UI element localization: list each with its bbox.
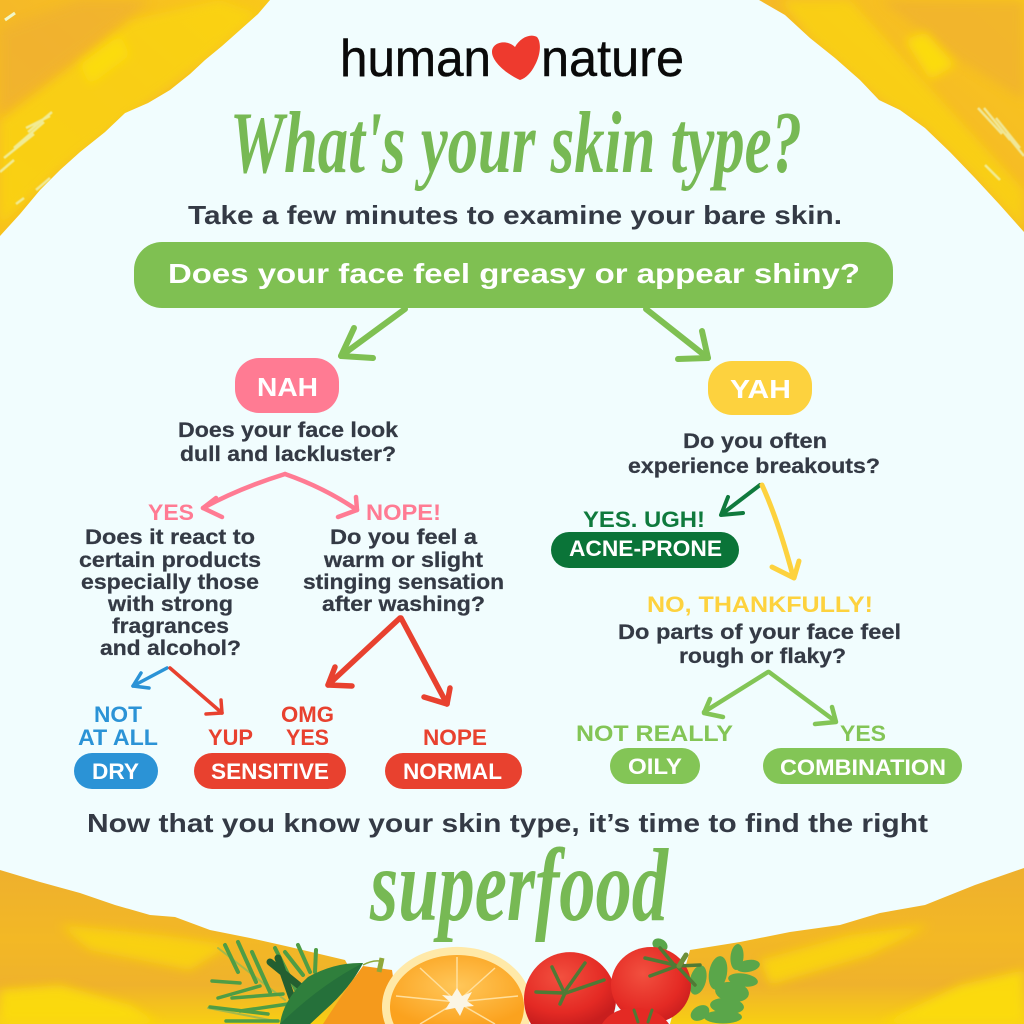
question: react: Does it react to xyxy=(85,526,255,549)
label: not really: NOT REALLY xyxy=(576,721,733,746)
YAH pill xyxy=(708,361,812,415)
logo: human xyxy=(340,30,491,88)
COMBINATION pill xyxy=(763,748,962,784)
question: rough xyxy=(618,621,901,668)
illustration: orange slice xyxy=(382,947,532,1024)
SENSITIVE pill: SENSITIVE xyxy=(211,759,329,784)
illustration: whole orange xyxy=(323,958,400,1024)
question: stinging: stinging sensation xyxy=(303,571,504,594)
arrows: light green xyxy=(704,672,836,724)
question: react: fragrances xyxy=(112,615,229,638)
arrow: to NAH xyxy=(341,309,405,358)
question: dull xyxy=(178,419,398,466)
illustration: herb sprig xyxy=(208,942,316,1021)
OILY pill xyxy=(610,748,700,784)
label: omg yes: YES xyxy=(286,725,329,750)
arrows: thick red xyxy=(328,618,450,704)
label: nope: NOPE xyxy=(423,725,487,750)
OILY pill: OILY xyxy=(628,754,682,779)
question: stinging: warm or slight xyxy=(323,549,483,572)
DRY pill xyxy=(74,753,158,789)
label: yup: YUP xyxy=(208,725,253,750)
arrows: pink branch xyxy=(203,474,357,517)
question: breakouts: experience breakouts? xyxy=(628,455,880,478)
arrow: yellow xyxy=(762,485,799,578)
icon: heart xyxy=(492,36,540,80)
NAH pill: NAH xyxy=(257,372,318,402)
question: react: especially those xyxy=(81,571,259,594)
label: yes ugh: YES. UGH! xyxy=(583,507,705,532)
question: dull: dull and lackluster? xyxy=(180,443,396,466)
brush stroke: bottom right xyxy=(670,868,1024,1024)
brush stroke: top right xyxy=(759,0,1024,232)
main question pill: Does your face feel greasy or appear shiny? xyxy=(168,258,860,289)
label: NOPE!: NOPE! xyxy=(366,500,441,525)
label: omg yes: OMG xyxy=(281,702,334,727)
label: not at all: NOT xyxy=(94,702,143,727)
illustration: moringa leaves xyxy=(650,936,761,1024)
SENSITIVE pill xyxy=(194,753,346,789)
label: omg yes xyxy=(281,702,334,750)
question: react: certain products xyxy=(79,549,261,572)
ACNE-PRONE pill xyxy=(551,532,739,568)
NORMAL pill xyxy=(385,753,522,789)
label: yes: YES xyxy=(840,721,886,746)
DRY pill: DRY xyxy=(92,759,139,784)
arrow: thin red xyxy=(170,668,222,714)
question: dull: Does your face look xyxy=(178,419,398,442)
label: no thankfully: NO, THANKFULLY! xyxy=(647,592,873,617)
label: not at all xyxy=(78,702,158,750)
arrow: blue xyxy=(133,668,167,688)
closing text: Now that you know your skin type, it’s time to find the right xyxy=(87,808,928,838)
arrow: to YAH xyxy=(646,309,708,359)
question: react: with strong xyxy=(107,593,233,616)
main question pill xyxy=(134,242,893,308)
label: YES: YES xyxy=(148,500,194,525)
COMBINATION pill: COMBINATION xyxy=(780,755,946,780)
logo: nature xyxy=(541,30,684,88)
question: rough: Do parts of your face feel xyxy=(618,621,901,644)
ACNE-PRONE pill: ACNE-PRONE xyxy=(569,536,722,561)
illustration: tomatoes xyxy=(524,947,700,1024)
question: rough: rough or flaky? xyxy=(679,645,846,668)
label: not at all: AT ALL xyxy=(78,725,158,750)
NAH pill xyxy=(235,358,339,413)
question: stinging xyxy=(303,526,504,616)
subtitle: Take a few minutes to examine your bare skin. xyxy=(188,200,842,230)
question: react xyxy=(79,526,261,660)
question: react: and alcohol? xyxy=(100,637,241,660)
superfood script: superfood xyxy=(369,828,669,943)
logo xyxy=(340,30,684,88)
NORMAL pill: NORMAL xyxy=(403,759,502,784)
question: stinging: Do you feel a xyxy=(330,526,477,549)
question: stinging: after washing? xyxy=(322,593,485,616)
question: breakouts xyxy=(628,430,880,478)
illustration: leaf xyxy=(280,963,363,1024)
brush stroke: top left xyxy=(0,0,270,236)
question: breakouts: Do you often xyxy=(683,430,827,453)
arrow: dark green xyxy=(721,485,760,515)
brush stroke: bottom left xyxy=(0,870,380,1024)
YAH pill: YAH xyxy=(730,374,791,404)
